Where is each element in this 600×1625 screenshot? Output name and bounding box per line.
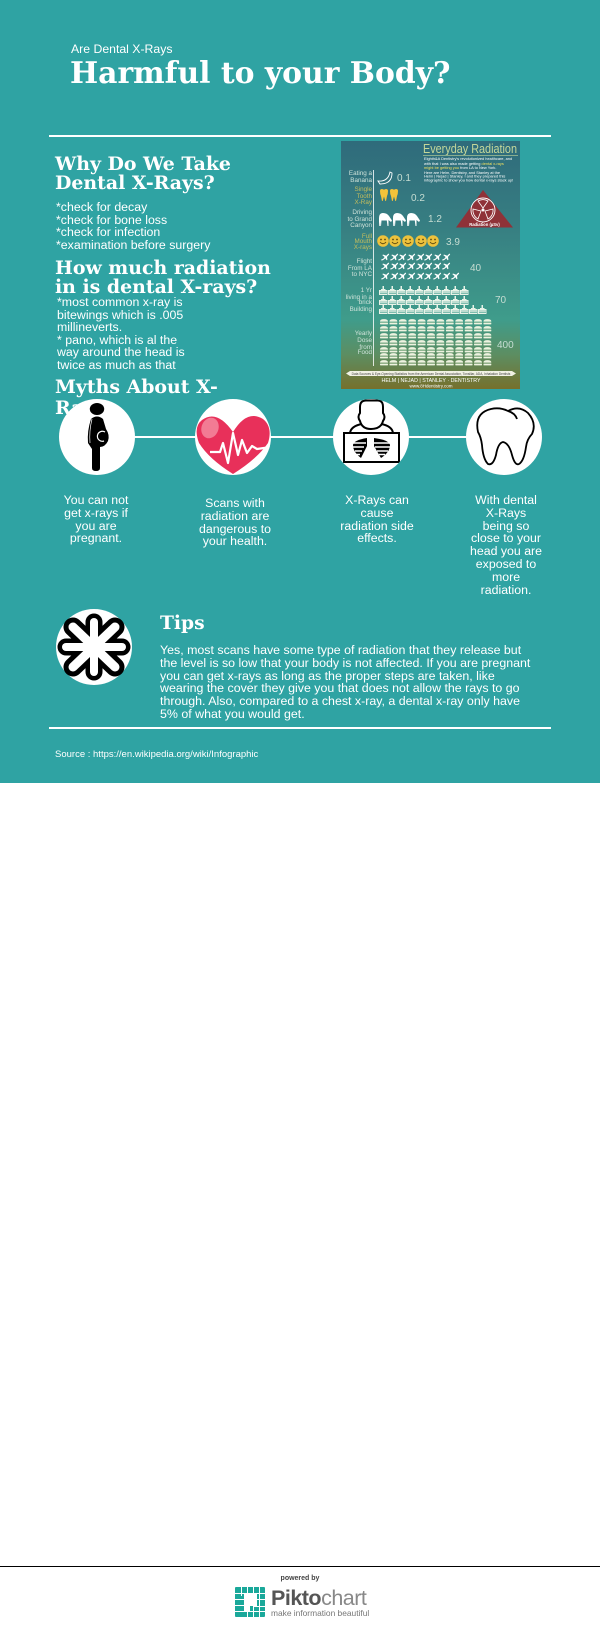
text: tips: through. Also, compared to a chest x-ray, a dental x-ray only have	[160, 694, 520, 708]
caption: proximity: close to your	[471, 531, 541, 545]
heading: why	[54, 153, 231, 194]
icon: teeth	[380, 189, 398, 201]
icon: smileys	[377, 235, 439, 247]
text: powered by: powered by	[281, 1575, 319, 1582]
text: radiation amount	[57, 295, 185, 372]
list: reasons: *check for decay	[56, 200, 147, 214]
poster row labels: Yearly	[355, 330, 373, 337]
caption: side effects: radiation side	[340, 519, 414, 533]
text: radiation amount: *most common x-ray is	[57, 295, 183, 309]
text: radiation amount: millineverts.	[57, 320, 122, 334]
heading: why: Dental X-Rays?	[55, 172, 215, 194]
caption: proximity: X-Rays	[486, 506, 526, 520]
poster row labels: Banana	[350, 177, 372, 184]
poster row labels: 1 Yr	[361, 287, 372, 294]
poster footer banner	[346, 371, 516, 388]
poster footer banner: HELM | NEJAD | STANLEY · DENTISTRY	[382, 378, 481, 384]
eyebrow heading: Are Dental X-Rays	[71, 42, 172, 56]
icon: heart with pulse	[195, 399, 271, 475]
icon: radiation triangle	[456, 190, 513, 228]
text: radiation amount: bitewings which is .005	[57, 308, 183, 322]
heading: myths: Rays	[55, 397, 105, 419]
caption: pregnancy: pregnant.	[70, 531, 122, 545]
poster intro text: Helm | Nejad | Stanley, I and they prepared this	[424, 174, 505, 178]
text: radiation amount: twice as much as that	[57, 358, 176, 372]
icon: camels	[379, 213, 420, 226]
text: radiation amount: * pano, which is al the	[57, 332, 177, 346]
heading: radiation amount	[55, 257, 271, 298]
caption: side effects: X-Rays can	[345, 493, 409, 507]
poster values: 3.9	[446, 237, 460, 248]
poster intro text: with that I was also made getting dental x-rays	[424, 161, 504, 166]
source: Source : https://en.wikipedia.org/wiki/Infographic	[55, 749, 258, 760]
caption: proximity: radiation.	[481, 583, 531, 597]
caption: proximity: With dental	[475, 493, 537, 507]
list: reasons	[56, 200, 210, 252]
caption: side effects: effects.	[357, 531, 397, 545]
caption: side effects	[340, 493, 414, 545]
text: tagline: make information beautiful	[271, 1608, 369, 1618]
icon: planes	[381, 254, 459, 280]
poster row labels: brick	[359, 299, 373, 306]
heading: tips: Tips	[160, 612, 205, 634]
poster values: 0.2	[411, 193, 425, 204]
caption: scans: your health.	[203, 534, 267, 548]
infographic poster: everyday radiation	[341, 141, 520, 389]
caption: scans: dangerous to	[199, 522, 271, 536]
text: tips: the level is so low that your body is not affected. If you are pregnant	[160, 656, 530, 670]
caption: pregnancy: You can not	[64, 493, 128, 507]
icon: burgers	[380, 319, 491, 365]
caption: proximity: head you are	[470, 544, 542, 558]
caption: scans: radiation are	[201, 509, 269, 523]
icon: banana	[378, 172, 392, 184]
text: tips: Yes, most scans have some type of radiation that they release but	[160, 643, 521, 657]
list: reasons: *check for bone loss	[56, 213, 167, 227]
icon: radiation triangle: Radiation (µSv)	[469, 222, 500, 227]
caption: scans: Scans with	[205, 496, 265, 510]
caption: side effects: cause	[361, 506, 393, 520]
title: Harmful to your Body?	[70, 56, 450, 91]
text: radiation amount: way around the head is	[57, 345, 185, 359]
icon: buildings	[379, 286, 486, 314]
footer: piktochart logo	[235, 1574, 369, 1618]
poster row labels: from	[359, 344, 372, 351]
poster row labels: Single	[354, 186, 372, 193]
poster row labels: Tooth	[357, 193, 372, 200]
text: tips: 5% of what you would get.	[160, 707, 305, 721]
heading: myths	[55, 376, 218, 419]
poster values: 0.1	[397, 173, 411, 184]
text: tips: wearing the cover they give you that does not allow the rays to go	[160, 681, 520, 695]
icon: tips asterisk	[56, 609, 132, 685]
poster row labels	[346, 170, 373, 356]
poster values: 40	[470, 263, 482, 274]
poster values: 1.2	[428, 214, 442, 225]
poster row labels: to NYC	[352, 271, 372, 278]
caption: pregnancy	[64, 493, 128, 545]
caption: proximity: more	[492, 570, 520, 584]
icon: piktochart mark	[235, 1587, 265, 1617]
text: tips: you can get x-rays as long as the proper steps are taken, like	[160, 669, 495, 683]
footer rule	[0, 1566, 600, 1567]
poster row labels: X-rays	[354, 244, 372, 251]
caption: scans	[199, 496, 271, 548]
caption: pregnancy: get x-rays if	[64, 506, 128, 520]
heading: radiation amount: How much radiation	[55, 257, 271, 279]
poster intro text: Eighth&A Dentistry's revolutionized healthcare, and	[424, 156, 512, 161]
icon: chest x-ray	[333, 399, 409, 475]
poster row labels: Full	[362, 233, 372, 240]
icon: pregnant woman	[59, 399, 135, 475]
heading: myths: Myths About X-	[55, 376, 218, 398]
caption: proximity	[470, 493, 542, 597]
poster values	[397, 173, 514, 351]
poster footer banner: www.8Hdentistry.com	[410, 384, 453, 388]
poster row labels: living in a	[346, 294, 372, 301]
poster row labels: X-Ray	[354, 199, 373, 206]
poster row labels: Food	[358, 349, 372, 356]
list: reasons: *check for infection	[56, 225, 160, 239]
heading: why: Why Do We Take	[55, 153, 231, 175]
poster intro text: Here are Helm, Dentistry, and Stanley at the	[424, 170, 500, 175]
connector line	[97, 436, 505, 438]
poster row labels: Mouth	[354, 238, 372, 245]
caption: proximity: exposed to	[476, 557, 536, 571]
poster row labels: Flight	[357, 258, 372, 265]
poster row labels: Canyon	[350, 222, 372, 229]
poster values: 400	[497, 340, 514, 351]
poster values: 70	[495, 295, 507, 306]
poster intro text	[424, 156, 513, 182]
poster row labels: Building	[350, 306, 372, 313]
poster row labels: to Grand	[347, 216, 372, 223]
poster intro text: infographic to show you how dental x-rays stack up!	[424, 178, 513, 182]
caption: pregnancy: you are	[75, 519, 117, 533]
text: tips	[160, 643, 530, 721]
poster row labels: Eating a	[349, 170, 372, 177]
list: reasons: *examination before surgery	[56, 238, 210, 252]
poster footer banner: Data Sources & Eye-Opening Statistics from the American Dental Association, Tonsillar, ADA, Inhalation Dentists	[352, 372, 511, 376]
heading: radiation amount: in is dental X-rays?	[55, 276, 257, 298]
caption: proximity: being so	[483, 519, 529, 533]
poster row labels: Driving	[352, 209, 372, 216]
poster intro text: might be getting you from LA to New York.	[424, 165, 496, 170]
poster row labels: Dose	[357, 337, 372, 344]
poster row labels: From LA	[348, 265, 373, 272]
icon: tooth	[466, 399, 542, 475]
text: piktochart wordmark: Piktochart	[271, 1586, 366, 1610]
